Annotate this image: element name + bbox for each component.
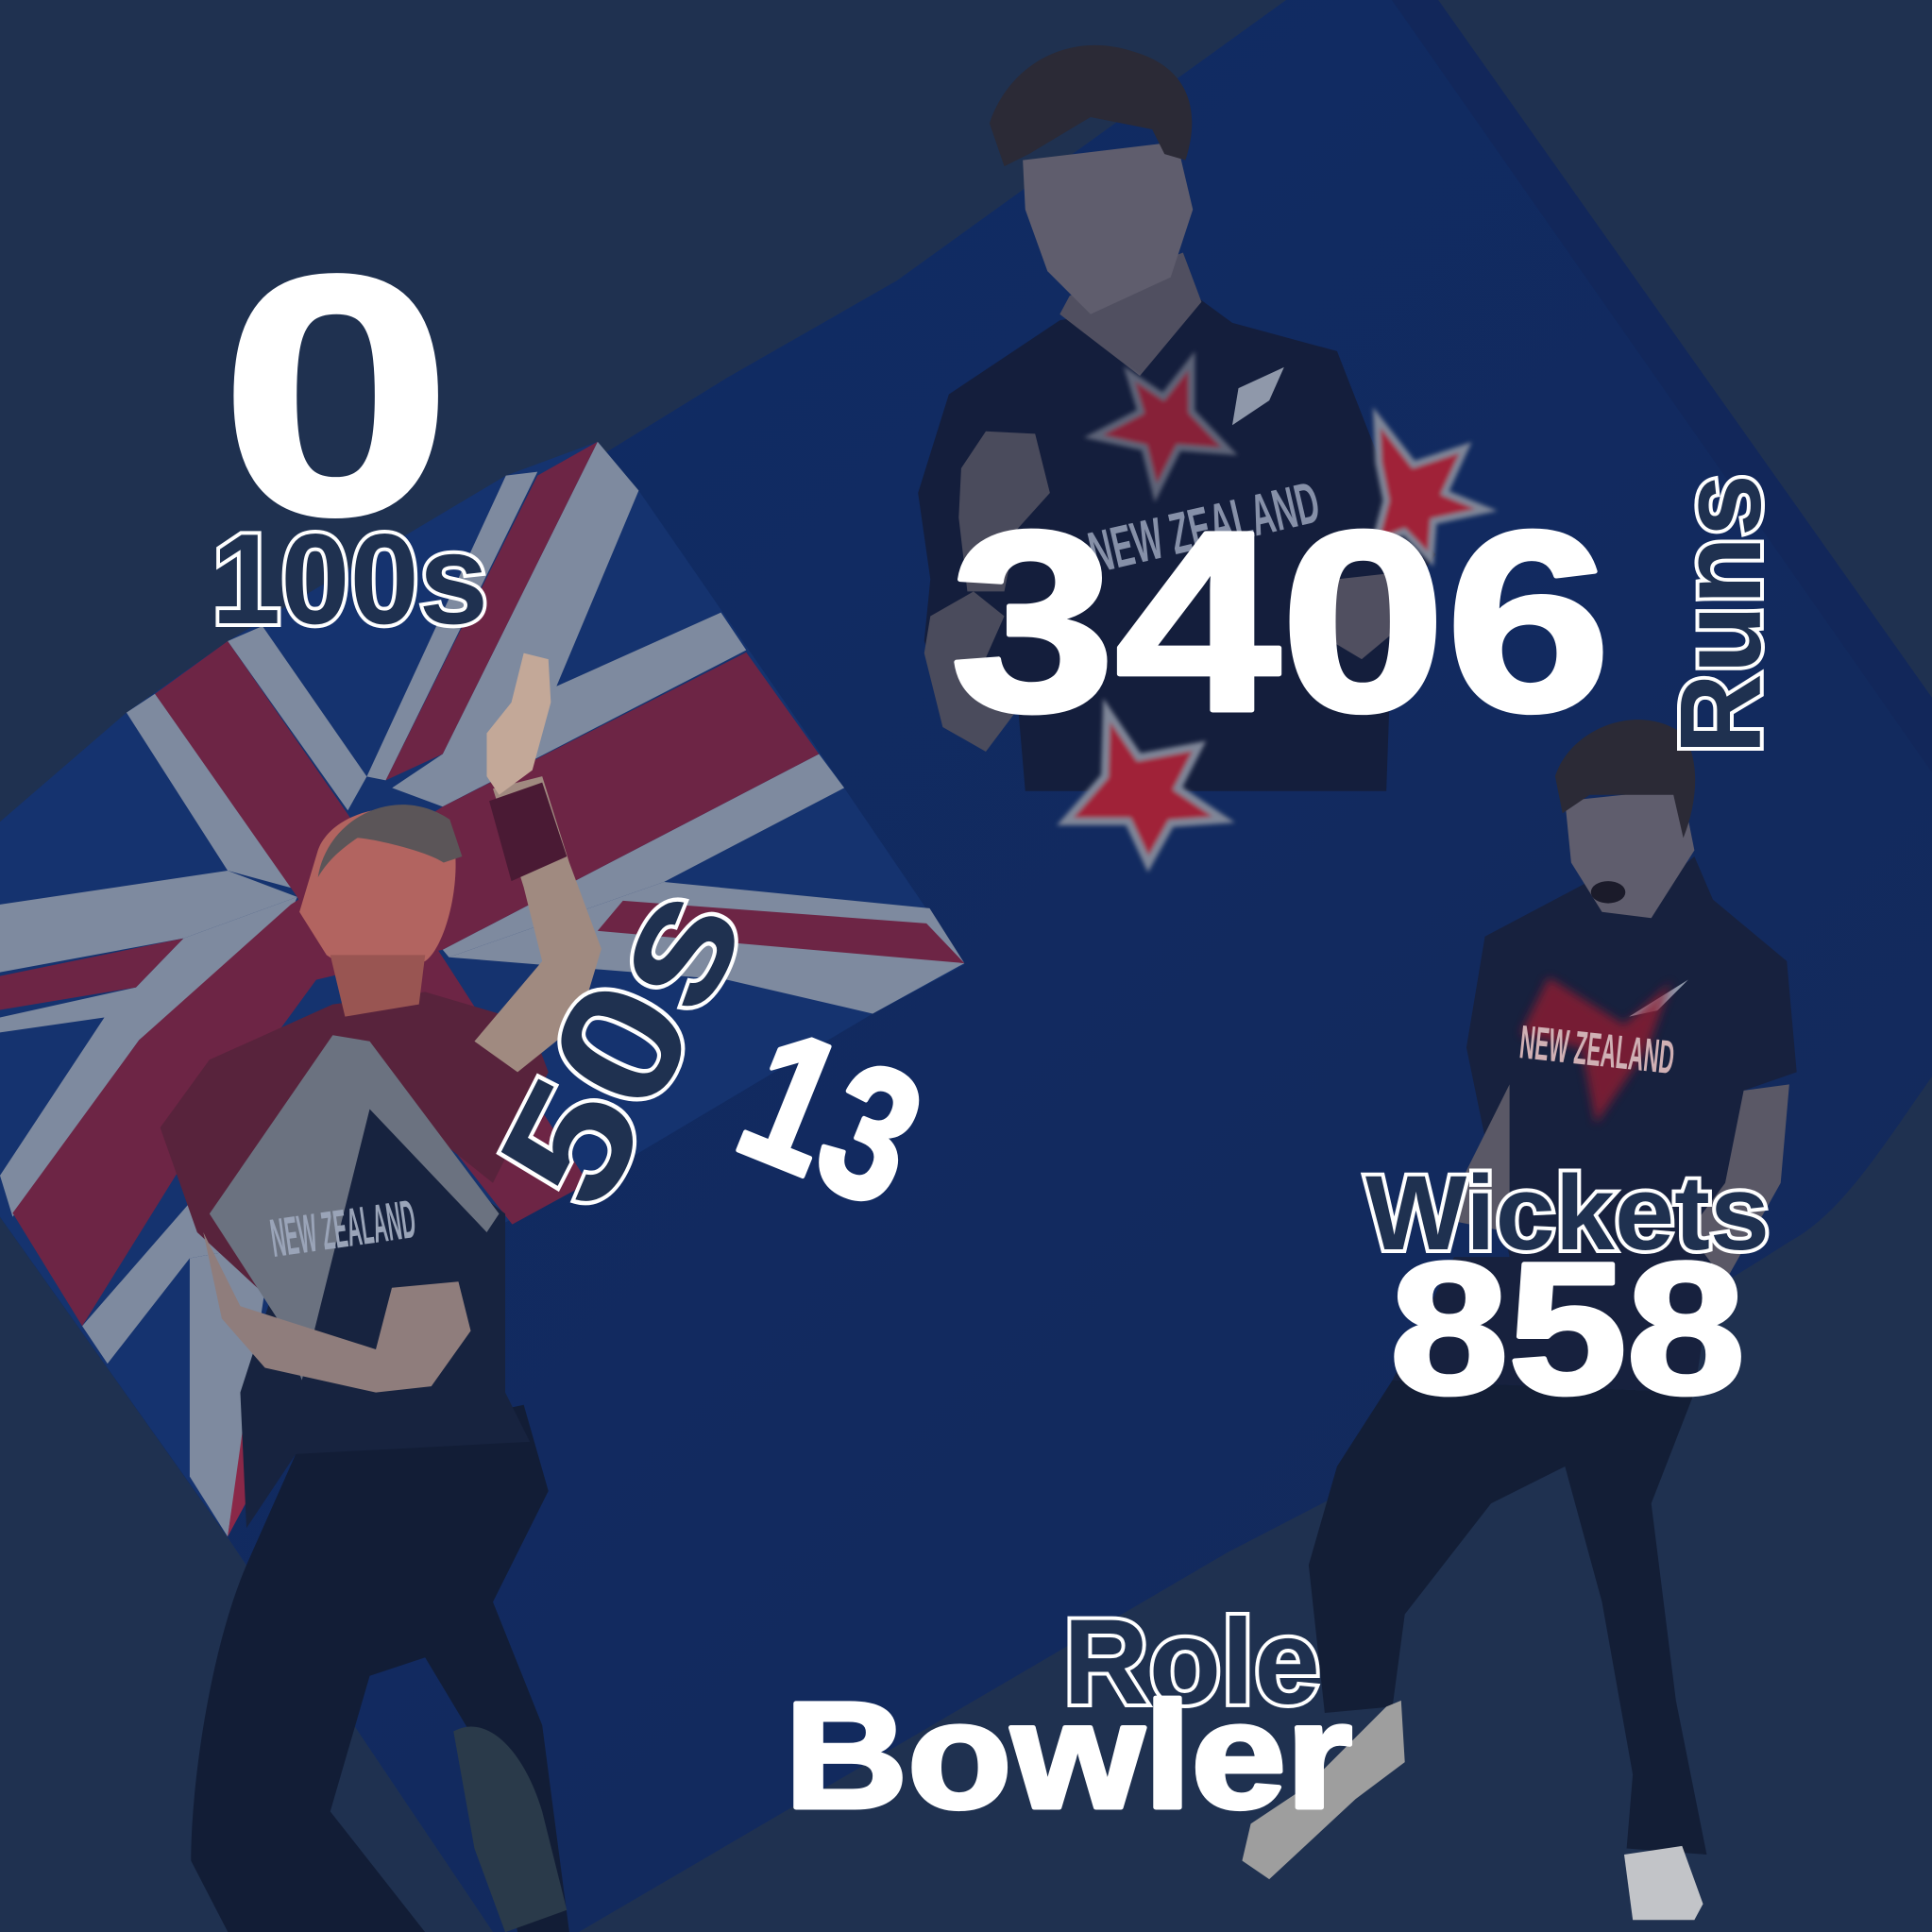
left bowler figure: NEW ZEALAND (267, 1189, 419, 1269)
trousers (1309, 1381, 1706, 1855)
fern (1629, 979, 1688, 1017)
top right figure (918, 45, 1435, 791)
neck (330, 955, 425, 1017)
fist (958, 432, 1050, 591)
stat: runs value: 3406 (950, 478, 1611, 765)
torso (240, 1109, 530, 1528)
stat: 50s label: 50s (463, 855, 782, 1235)
star 1 (1093, 361, 1229, 493)
arm left (1448, 1084, 1510, 1232)
left bowler figure (161, 653, 602, 1932)
star 4 (1520, 977, 1671, 1124)
stat: wickets value: 858 (1390, 1224, 1745, 1432)
star 2 (1375, 417, 1486, 559)
wristband (489, 783, 567, 881)
right shoe (1624, 1846, 1703, 1920)
hair (1555, 720, 1695, 838)
star 3 (1065, 710, 1224, 864)
shirt (918, 296, 1435, 791)
neck (1059, 253, 1201, 376)
head (299, 808, 456, 983)
text: NEW ZEALAND (1517, 1015, 1677, 1084)
stat: role label: Role (1063, 1595, 1320, 1730)
jersey text: top figure: NEW ZEALAND (1083, 470, 1326, 586)
trousers (191, 1405, 569, 1932)
hand and ball (486, 653, 551, 795)
stat: runs label: Runs (1656, 474, 1785, 754)
union jack canton (0, 442, 964, 1536)
stat: 100s label: 100s (212, 507, 488, 651)
right figure (1242, 720, 1797, 1920)
stat: role value: Bowler (785, 1670, 1352, 1839)
arm lower (203, 1232, 471, 1393)
torso (1393, 856, 1797, 1393)
left shoe (1242, 1701, 1405, 1879)
hair (990, 45, 1192, 166)
mouth (1591, 881, 1625, 904)
head (1565, 788, 1694, 918)
lower arm (924, 591, 1023, 752)
fern (1232, 367, 1284, 425)
raised arm (474, 776, 602, 1072)
stat: 100s value: 0 (220, 206, 452, 585)
stat: wickets label: Wickets (1365, 1154, 1770, 1272)
arm right (1688, 1084, 1789, 1281)
right fist (1330, 573, 1398, 659)
stat: 50s value: 13 (714, 989, 948, 1247)
hair (318, 805, 462, 877)
face (1023, 142, 1193, 314)
shoe sole (453, 1726, 567, 1932)
shirt upper over flag (161, 992, 549, 1306)
